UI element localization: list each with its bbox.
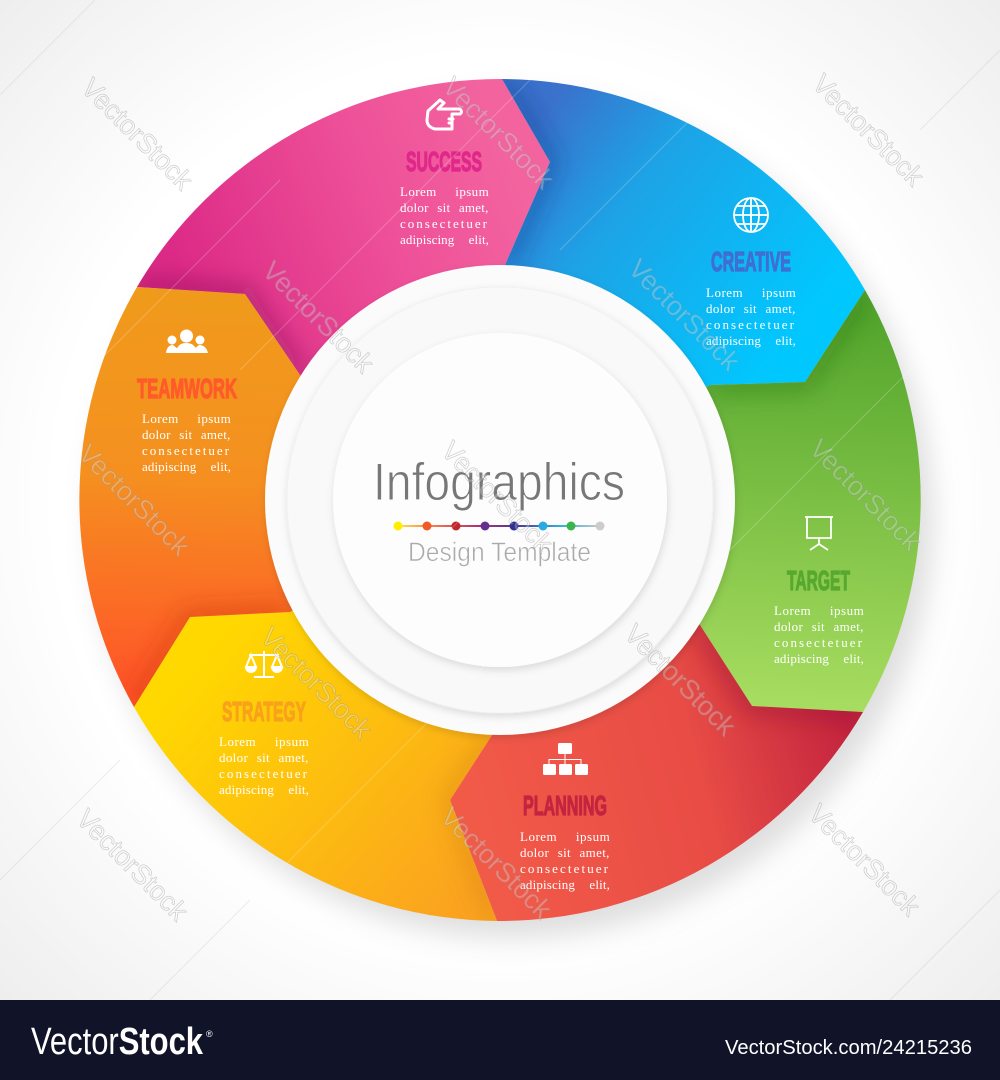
text block: consectetuer: [706, 317, 796, 332]
footer url: VectorStock.com/24215236: [725, 1037, 972, 1059]
heading: CREATIVE: [711, 246, 791, 277]
text block: dolor sit amet,: [774, 619, 864, 634]
registered mark: ®: [206, 1029, 213, 1039]
text block: consectetuer: [400, 216, 489, 231]
watermarks: VectorStock: [434, 801, 558, 925]
icon: globe: [734, 198, 768, 232]
centre disc: [265, 265, 735, 735]
watermarks: VectorStock: [806, 68, 930, 192]
watermarks: VectorStock: [254, 621, 378, 745]
heading: PLANNING: [523, 790, 607, 821]
text block: adipiscing elit,: [774, 651, 864, 666]
watermarks: VectorStock: [435, 435, 559, 559]
heading: SUCCESS: [406, 146, 482, 177]
segment: planning: [450, 500, 863, 921]
segment: creative: [500, 79, 865, 500]
text block: dolor sit amet,: [400, 200, 489, 215]
text block: adipiscing elit,: [520, 877, 610, 892]
heading: TARGET: [787, 565, 850, 596]
ring drop shadow: [93, 98, 933, 938]
text block: adipiscing elit,: [219, 782, 309, 797]
panel: target: [774, 517, 864, 666]
icon: pointing hand: [427, 100, 462, 129]
colour dot timeline: [394, 522, 604, 530]
watermarks: VectorStock: [802, 798, 926, 922]
ring of six arrow segments: [79, 79, 921, 921]
watermarks: VectorStock: [436, 71, 560, 195]
text block: consectetuer: [142, 443, 231, 458]
text block: Lorem ipsum: [520, 829, 610, 844]
text block: dolor sit amet,: [219, 750, 309, 765]
icon: org chart: [543, 743, 588, 775]
panel: success: [400, 100, 489, 247]
icon: balance scale: [246, 651, 282, 677]
text block: Lorem ipsum: [400, 184, 489, 199]
footer bar: [0, 1000, 1000, 1080]
text block: dolor sit amet,: [520, 845, 610, 860]
panel: teamwork: [137, 330, 237, 474]
text block: [400, 184, 489, 247]
text block: adipiscing elit,: [400, 232, 489, 247]
watermarks: VectorStock: [803, 433, 927, 557]
text block: Lorem ipsum: [142, 411, 231, 426]
watermarks: VectorStock: [622, 253, 746, 377]
text block: [706, 285, 796, 348]
segment: teamwork: [79, 287, 500, 707]
text block: [219, 734, 309, 797]
watermarks: VectorStock: [618, 618, 742, 742]
heading: TEAMWORK: [137, 373, 237, 404]
subtitle: Design Template: [408, 537, 591, 567]
heading: STRATEGY: [222, 696, 306, 727]
text block: dolor sit amet,: [142, 427, 231, 442]
panel: planning: [520, 743, 610, 892]
text block: consectetuer: [219, 766, 309, 781]
watermarks: VectorStock: [72, 438, 196, 562]
panel: strategy: [219, 651, 309, 797]
text block: Lorem ipsum: [774, 603, 864, 618]
icon: presentation board: [805, 517, 833, 550]
footer logo: VectorStock: [31, 1021, 204, 1063]
text block: Lorem ipsum: [219, 734, 309, 749]
text block: consectetuer: [774, 635, 864, 650]
text block: dolor sit amet,: [706, 301, 796, 316]
text block: [520, 829, 610, 892]
text block: adipiscing elit,: [706, 333, 796, 348]
segment: success: [137, 79, 550, 500]
title: Infographics: [373, 453, 625, 512]
icon: people: [166, 330, 208, 353]
watermarks: VectorStock: [75, 72, 199, 196]
text block: adipiscing elit,: [142, 459, 231, 474]
text block: [142, 411, 231, 474]
panel: creative: [706, 198, 796, 348]
watermarks: VectorStock: [256, 255, 380, 379]
watermarks: [70, 68, 930, 927]
text block: consectetuer: [520, 861, 610, 876]
watermarks: VectorStock: [70, 803, 194, 927]
text block: Lorem ipsum: [706, 285, 796, 300]
text block: [774, 603, 864, 666]
segment: target: [500, 290, 921, 712]
segment: strategy: [134, 500, 500, 921]
